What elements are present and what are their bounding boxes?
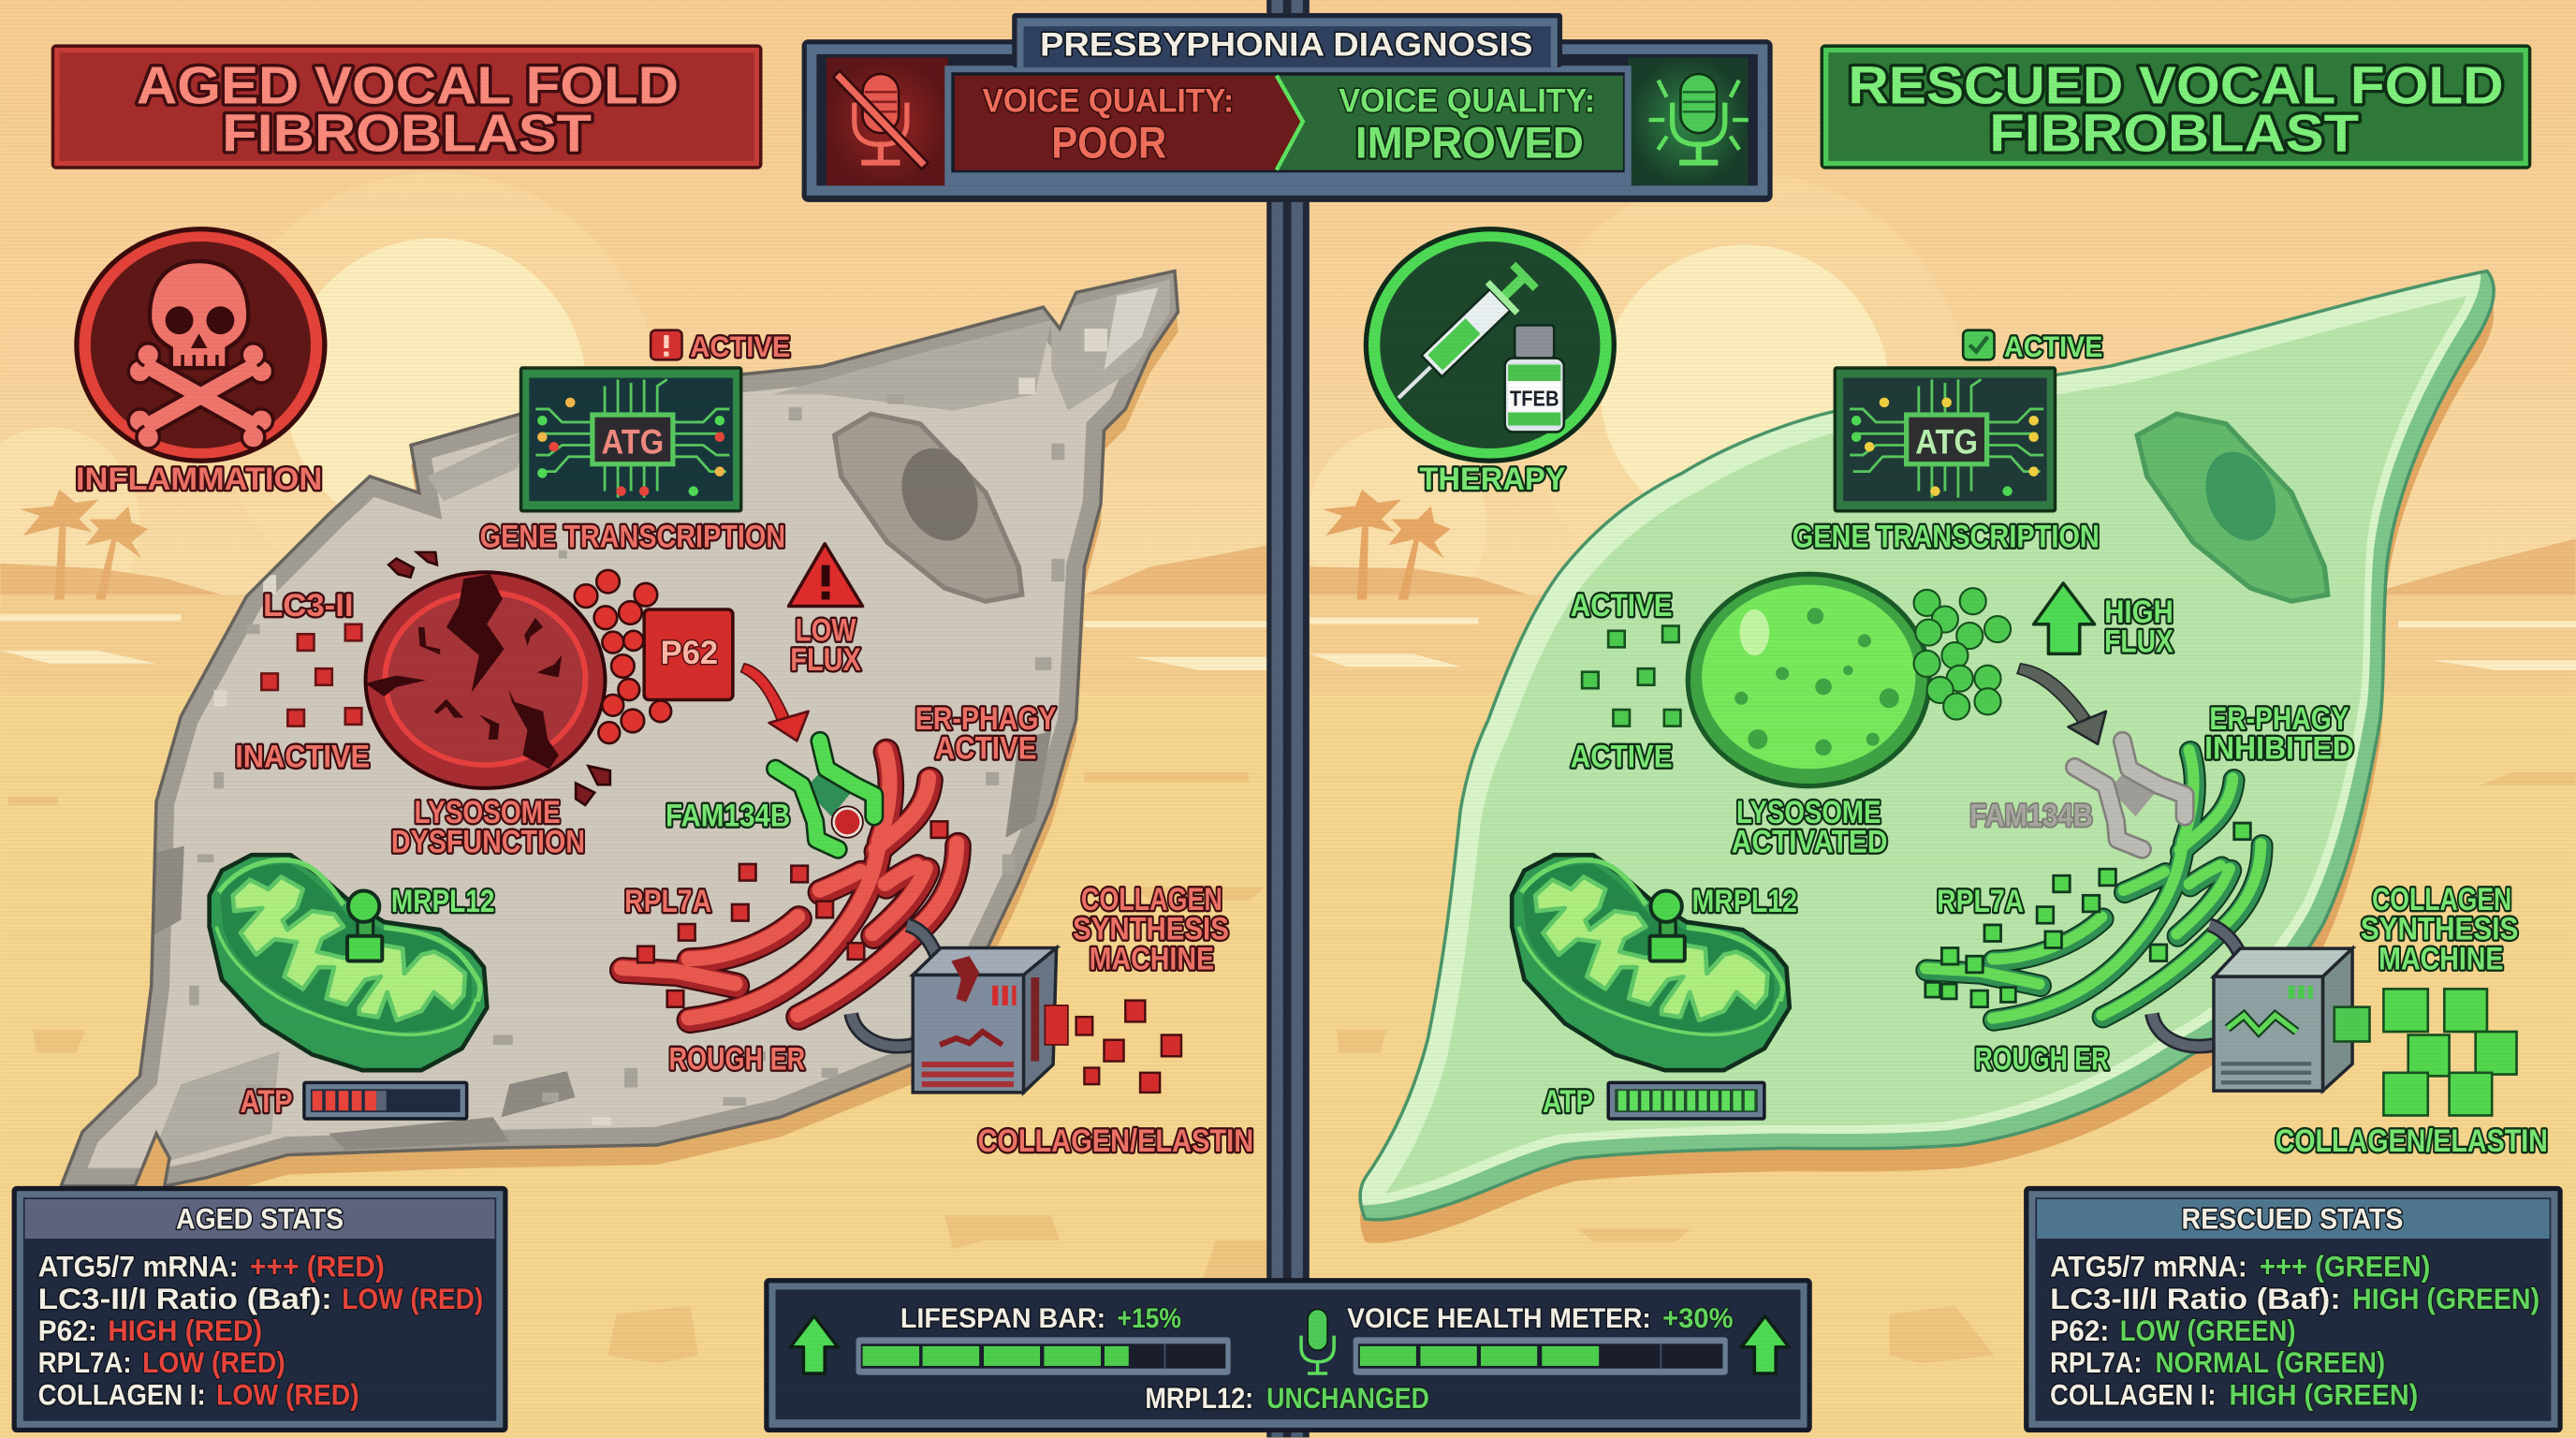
voice quality poor text: VOICE QUALITY: <box>983 82 1234 119</box>
label: er-phagy inhibited: ER-PHAGY <box>2209 701 2349 737</box>
icon: palm trees right <box>1323 490 1451 599</box>
title: rescued vocal fold fibroblast <box>1821 44 2531 169</box>
meter: ATP full: ATP <box>1543 1084 1593 1120</box>
label: low flux <box>790 612 861 678</box>
title: rescued vocal fold fibroblast: FIBROBLAST <box>1989 103 2359 162</box>
panel: rescued stats: RPL7A: <box>2050 1345 2142 1379</box>
panel: rescued stats: HIGH (GREEN) <box>2352 1282 2539 1315</box>
status: aged ATG active <box>651 330 790 363</box>
label: lysosome dysfunction <box>391 795 585 860</box>
label: voice health meter: VOICE HEALTH METER: <box>1347 1303 1651 1334</box>
title: rescued vocal fold fibroblast: RESCUED VOCAL FOLD <box>1848 56 2503 115</box>
label: RPL7A: RPL7A <box>624 884 711 919</box>
icon: microphone <box>1301 1310 1334 1373</box>
protein: FAM134B green <box>776 741 874 849</box>
label: therapy: THERAPY <box>1419 462 1566 497</box>
organelle: mitochondrion aged <box>210 855 487 1070</box>
syringe <box>1383 258 1542 414</box>
label: er-phagy active: ACTIVE <box>935 731 1037 767</box>
voice quality poor text: POOR <box>1051 118 1166 168</box>
panel: aged stats: RPL7A: <box>38 1345 132 1379</box>
chip: aged ATG gene transcription: ATG <box>602 422 664 461</box>
label: LC3-II: LC3-II <box>263 588 354 624</box>
tab: heading <box>1012 13 1562 67</box>
panel: rescued stats: P62: <box>2050 1313 2109 1347</box>
label: collagen synthesis machine aged: MACHINE <box>1090 941 1214 976</box>
icon: right up arrow <box>1741 1316 1789 1373</box>
label: inactive: INACTIVE <box>235 739 370 774</box>
panel: rescued stats: LOW (GREEN) <box>2120 1313 2296 1347</box>
panel: rescued stats: +++ (GREEN) <box>2260 1249 2430 1283</box>
panel: aged stats: LOW (RED) <box>216 1377 359 1411</box>
title: aged vocal fold fibroblast: AGED VOCAL FOLD <box>137 56 679 115</box>
label: MRPL12 unchanged: UNCHANGED <box>1266 1381 1429 1415</box>
label: high flux: FLUX <box>2104 624 2174 660</box>
label: lysosome activated <box>1732 795 1887 860</box>
label: gene transcription rescued: GENE TRANSCRIPTION <box>1793 519 2100 554</box>
panel: rescued stats: ATG5/7 mRNA: <box>2050 1249 2247 1283</box>
vial <box>1505 325 1564 432</box>
meter: ATP low <box>240 1081 468 1121</box>
label: collagen/elastin aged: COLLAGEN/ELASTIN <box>977 1123 1253 1159</box>
label: er-phagy active <box>915 701 1057 767</box>
voice quality improved text: IMPROVED <box>1355 118 1584 168</box>
box: P62: P62 <box>661 635 718 671</box>
voice quality improved text <box>1339 82 1595 168</box>
label: MRPL12 unchanged <box>1145 1381 1429 1415</box>
label: collagen synthesis machine rescued: MACHINE <box>2378 941 2503 976</box>
label: collagen synthesis machine rescued: COLLAGEN <box>2372 882 2511 917</box>
label: collagen synthesis machine rescued: SYNTHESIS <box>2361 912 2518 947</box>
label: collagen synthesis machine aged: COLLAGEN <box>1081 882 1222 917</box>
label: low flux: FLUX <box>790 642 861 678</box>
label: active lower: ACTIVE <box>1571 739 1673 774</box>
protein: FAM134B gray inhibited <box>2075 741 2185 849</box>
improved segment <box>1277 76 1623 170</box>
nucleus: rescued <box>2137 414 2328 601</box>
rough ER: rescued <box>1925 750 2262 1020</box>
label: rough ER rescued: ROUGH ER <box>1974 1041 2109 1077</box>
label: er-phagy inhibited: INHIBITED <box>2204 731 2354 767</box>
label: collagen synthesis machine aged <box>1073 882 1229 976</box>
box: P62 <box>644 609 733 700</box>
panel: rescued stats <box>2024 1186 2563 1432</box>
label: active upper: ACTIVE <box>1571 588 1673 624</box>
panel: aged stats: LC3-II/I Ratio (Baf): <box>38 1282 332 1315</box>
particles: active LC3 <box>1582 626 1680 726</box>
panel: aged stats: LOW (RED) <box>342 1282 483 1315</box>
label: collagen synthesis machine rescued <box>2361 882 2518 976</box>
label: er-phagy inhibited <box>2204 701 2354 767</box>
label: high flux: HIGH <box>2104 594 2174 630</box>
label: low flux: LOW <box>796 612 856 648</box>
cracks <box>365 574 562 770</box>
panel: rescued stats: HIGH (GREEN) <box>2229 1377 2418 1411</box>
panel: bottom outcome meters <box>764 1278 1812 1432</box>
particles: collagen fragments <box>1076 1001 1181 1093</box>
panel: rescued stats: NORMAL (GREEN) <box>2155 1345 2385 1379</box>
rough ER: aged <box>622 750 959 1020</box>
panel: presbyphonia diagnosis <box>802 13 1773 202</box>
organelle: damaged lysosome <box>364 552 610 805</box>
panel: rescued stats: RESCUED STATS <box>2182 1202 2403 1236</box>
panel: rescued cell <box>1347 257 2513 1242</box>
meter: lifespan <box>856 1337 1231 1375</box>
chip: rescued ATG gene transcription: ATG <box>1915 422 1978 461</box>
meter: ATP low: ATP <box>240 1084 293 1120</box>
meter: voice health <box>1354 1337 1728 1375</box>
label: lysosome dysfunction: DYSFUNCTION <box>391 825 585 860</box>
label: MRPL12 unchanged: MRPL12: <box>1145 1381 1253 1415</box>
icon: left up arrow <box>790 1316 838 1373</box>
organelle: activated lysosome <box>1686 572 1932 788</box>
icon: inflammation skull badge <box>74 227 327 463</box>
panel: aged stats: LOW (RED) <box>142 1345 285 1379</box>
machine: damaged collagen synthesis machine <box>851 925 1068 1093</box>
meter: ATP full <box>1543 1081 1766 1121</box>
title: aged vocal fold fibroblast: FIBROBLAST <box>222 103 592 162</box>
machine: healthy collagen synthesis machine <box>2152 925 2369 1091</box>
particles: inactive LC3 <box>261 624 361 726</box>
label: lifespan bar: +15% <box>1118 1303 1181 1334</box>
icon: high flux arrow <box>2034 583 2095 653</box>
label: collagen synthesis machine aged: SYNTHESIS <box>1073 912 1229 947</box>
panel: aged cell <box>50 263 1199 1206</box>
poor segment <box>955 76 1303 170</box>
label: MRPL12 rescued: MRPL12 <box>1692 884 1797 919</box>
status: rescued ATG active: ACTIVE <box>2004 330 2102 363</box>
blocks: collagen output <box>2383 989 2517 1115</box>
voice quality poor text <box>983 82 1234 168</box>
arrow: red flux arrow <box>741 664 809 741</box>
center divider <box>1266 0 1310 1437</box>
panel: aged stats: +++ (RED) <box>250 1249 385 1283</box>
icon: therapy syringe and vial badge <box>1364 227 1617 463</box>
icon: active microphone <box>1651 74 1747 163</box>
label: lysosome activated: ACTIVATED <box>1732 825 1887 860</box>
chip: rescued ATG gene transcription <box>1834 366 2056 512</box>
panel: rescued stats: COLLAGEN I: <box>2050 1377 2216 1411</box>
particles: autophagy activators <box>1914 588 2011 720</box>
label: gene transcription aged: GENE TRANSCRIPTION <box>480 519 785 554</box>
label: lysosome activated: LYSOSOME <box>1736 795 1881 830</box>
label: FAM134B gray: FAM134B <box>1969 799 2093 834</box>
ribosomes <box>637 821 947 1007</box>
panel: rescued stats: LC3-II/I Ratio (Baf): <box>2050 1282 2341 1315</box>
nucleus: aged <box>835 414 1022 601</box>
panel: aged stats <box>12 1186 508 1432</box>
panel: aged stats: COLLAGEN I: <box>38 1377 206 1411</box>
panel: aged stats: ATG5/7 mRNA: <box>38 1249 239 1283</box>
particles: p62 aggregates <box>575 570 671 743</box>
label: MRPL12 aged: MRPL12 <box>391 884 494 919</box>
label: FAM134B: FAM134B <box>666 799 790 834</box>
icon: muted microphone <box>840 74 922 163</box>
label: inflammation: INFLAMMATION <box>76 462 322 497</box>
panel: aged stats: P62: <box>38 1313 97 1347</box>
organelle: mitochondrion rescued <box>1512 855 1790 1070</box>
label: er-phagy active: ER-PHAGY <box>915 701 1057 737</box>
status: aged ATG active: ACTIVE <box>690 330 790 363</box>
panel: aged stats: HIGH (RED) <box>108 1313 262 1347</box>
chip: aged ATG gene transcription <box>520 366 742 512</box>
voice quality improved text: VOICE QUALITY: <box>1339 82 1595 119</box>
title: aged vocal fold fibroblast <box>51 44 762 169</box>
ribosomes <box>1925 823 2250 1007</box>
label: high flux <box>2104 594 2174 660</box>
vial: TFEB <box>1510 386 1559 410</box>
label: lysosome dysfunction: LYSOSOME <box>414 795 561 830</box>
tab: heading: PRESBYPHONIA DIAGNOSIS <box>1040 27 1532 64</box>
panel: aged stats: AGED STATS <box>176 1202 344 1236</box>
icon: palm trees left <box>20 490 148 599</box>
shards <box>388 552 610 805</box>
arrow: gray inhibited flux arrow <box>2017 664 2106 744</box>
label: lifespan bar: LIFESPAN BAR: <box>900 1303 1105 1334</box>
label: rough ER aged: ROUGH ER <box>668 1041 805 1077</box>
status: rescued ATG active <box>1963 330 2102 363</box>
label: voice health meter: +30% <box>1662 1303 1734 1334</box>
label: RPL7A rescued: RPL7A <box>1937 884 2024 919</box>
icon: warning triangle <box>789 544 863 606</box>
